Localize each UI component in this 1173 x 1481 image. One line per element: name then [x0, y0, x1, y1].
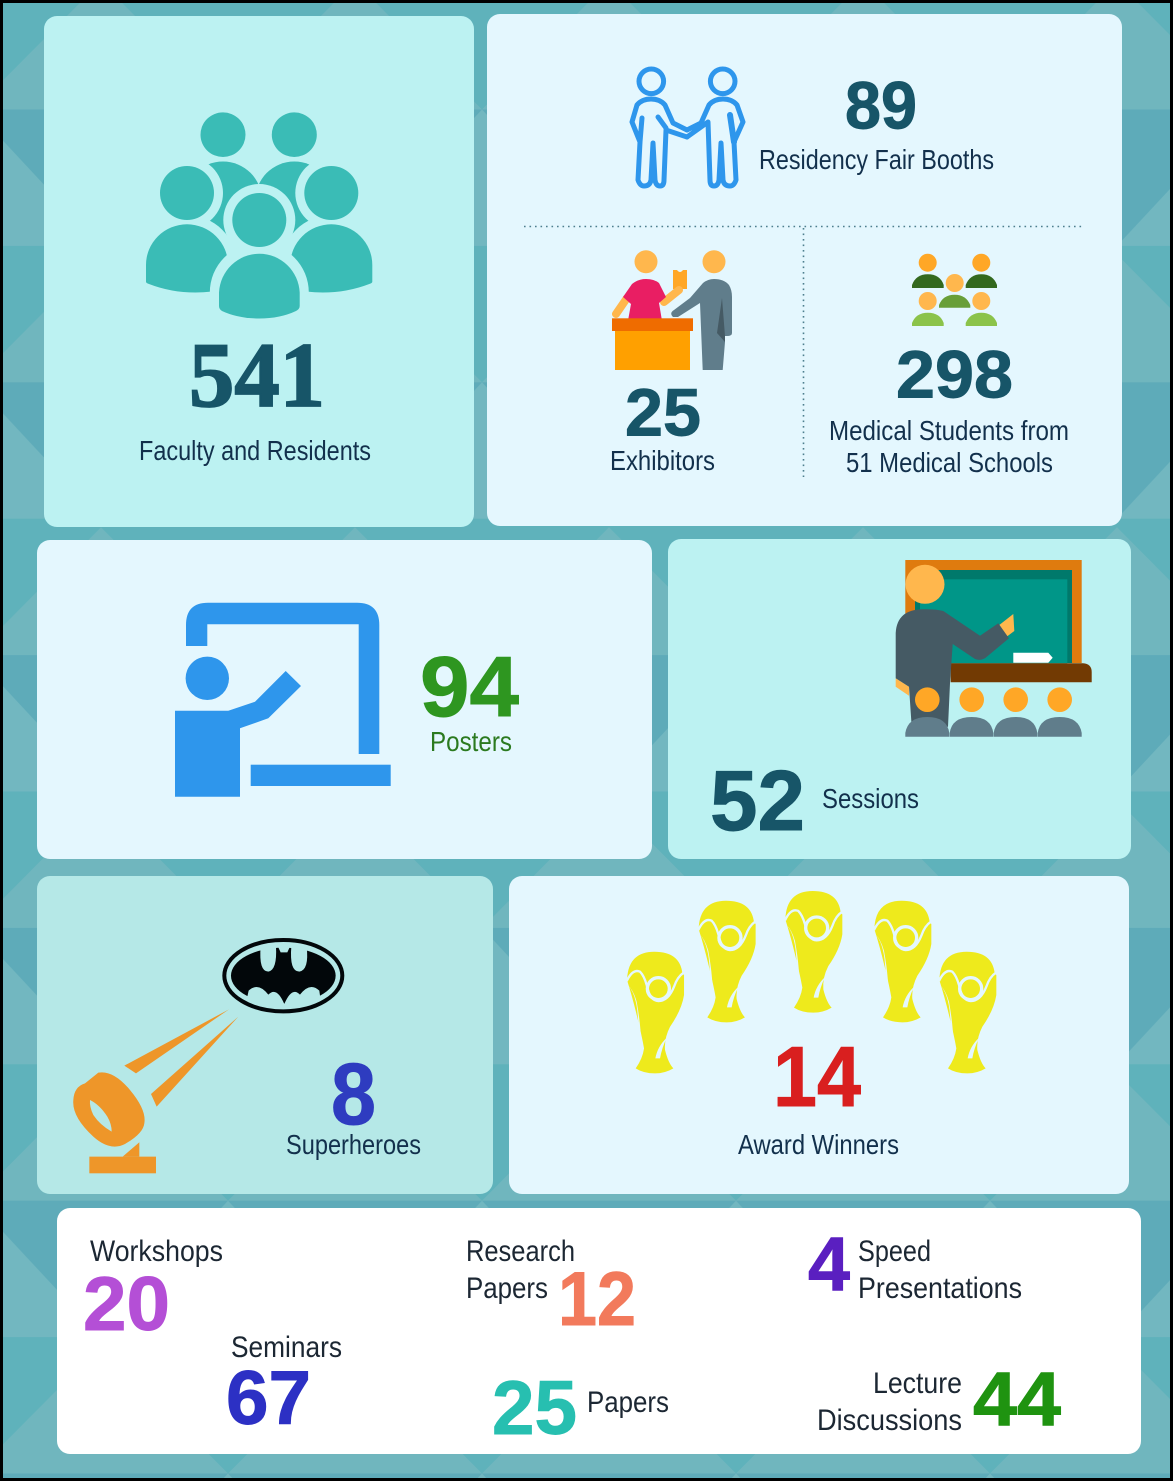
icon: exhibitor at desk — [612, 250, 732, 370]
panel: residency fair, exhibitors and students — [487, 14, 1122, 526]
icon: two people shaking hands — [632, 69, 743, 186]
icon: group of people — [146, 112, 372, 325]
icon: teacher at chalkboard with audience — [896, 560, 1092, 737]
number: 52: 52 — [710, 754, 805, 849]
stat: papers — [492, 1366, 669, 1451]
label: faculty and residents: Faculty and Residents — [139, 435, 371, 466]
label: medical students from 51 medical schools: Medical Students from — [829, 415, 1069, 446]
stat: seminars: Seminars — [231, 1331, 342, 1364]
stat: research papers — [466, 1235, 636, 1342]
label: medical students from 51 medical schools — [829, 415, 1069, 478]
icon: medical students — [912, 254, 997, 326]
number: 8: 8 — [331, 1046, 376, 1143]
number: 89: 89 — [845, 68, 917, 144]
label: exhibitors: Exhibitors — [610, 445, 715, 476]
stat: papers: 25 — [492, 1366, 577, 1451]
panel: posters — [37, 540, 652, 859]
panel: sessions — [668, 539, 1131, 859]
icon: presenter at board — [175, 603, 391, 797]
stat: papers: Papers — [587, 1386, 669, 1419]
number: 14: 14 — [773, 1030, 861, 1125]
stat: lecture discussions — [817, 1357, 1061, 1442]
stat: seminars — [226, 1331, 342, 1441]
label: residency fair booths: Residency Fair Booths — [759, 144, 994, 175]
icon: spotlight with beams — [73, 1009, 238, 1173]
stat: workshops: 20 — [83, 1262, 170, 1347]
panel: session type breakdown — [57, 1208, 1141, 1454]
stat: research papers: 12 — [558, 1257, 636, 1342]
number: 541: 541 — [189, 324, 325, 426]
panel: award winners — [509, 876, 1129, 1194]
label: sessions: Sessions — [822, 783, 919, 814]
number: 25 exhibitors: 25 — [625, 376, 701, 450]
stat: research papers: Research — [466, 1235, 575, 1268]
stat: speed presentations: Presentations — [858, 1272, 1022, 1305]
stat: seminars: 67 — [226, 1356, 311, 1441]
stat: research papers: Papers — [466, 1272, 548, 1305]
icon: bat signal emblem — [224, 940, 342, 1011]
stat: speed presentations — [808, 1222, 1022, 1307]
stat: speed presentations: 4 — [808, 1222, 850, 1307]
number: 298: 298 — [896, 338, 1013, 412]
icon: five trophies — [627, 891, 996, 1073]
label: medical students from 51 medical schools: 51 Medical Schools — [846, 447, 1053, 478]
number: 94: 94 — [420, 640, 519, 735]
panel: superheroes — [37, 876, 493, 1194]
stat: workshops — [83, 1235, 223, 1347]
label: posters: Posters — [430, 726, 512, 757]
stat: lecture discussions: Lecture — [873, 1367, 962, 1400]
label: superheroes: Superheroes — [286, 1129, 421, 1160]
panel: faculty and residents — [44, 16, 474, 527]
stat: speed presentations: Speed — [858, 1235, 931, 1268]
stat: workshops: Workshops — [90, 1235, 223, 1268]
stat: lecture discussions: Discussions — [817, 1404, 962, 1437]
stat: lecture discussions: 44 — [973, 1357, 1061, 1442]
label: award winners: Award Winners — [738, 1129, 899, 1160]
